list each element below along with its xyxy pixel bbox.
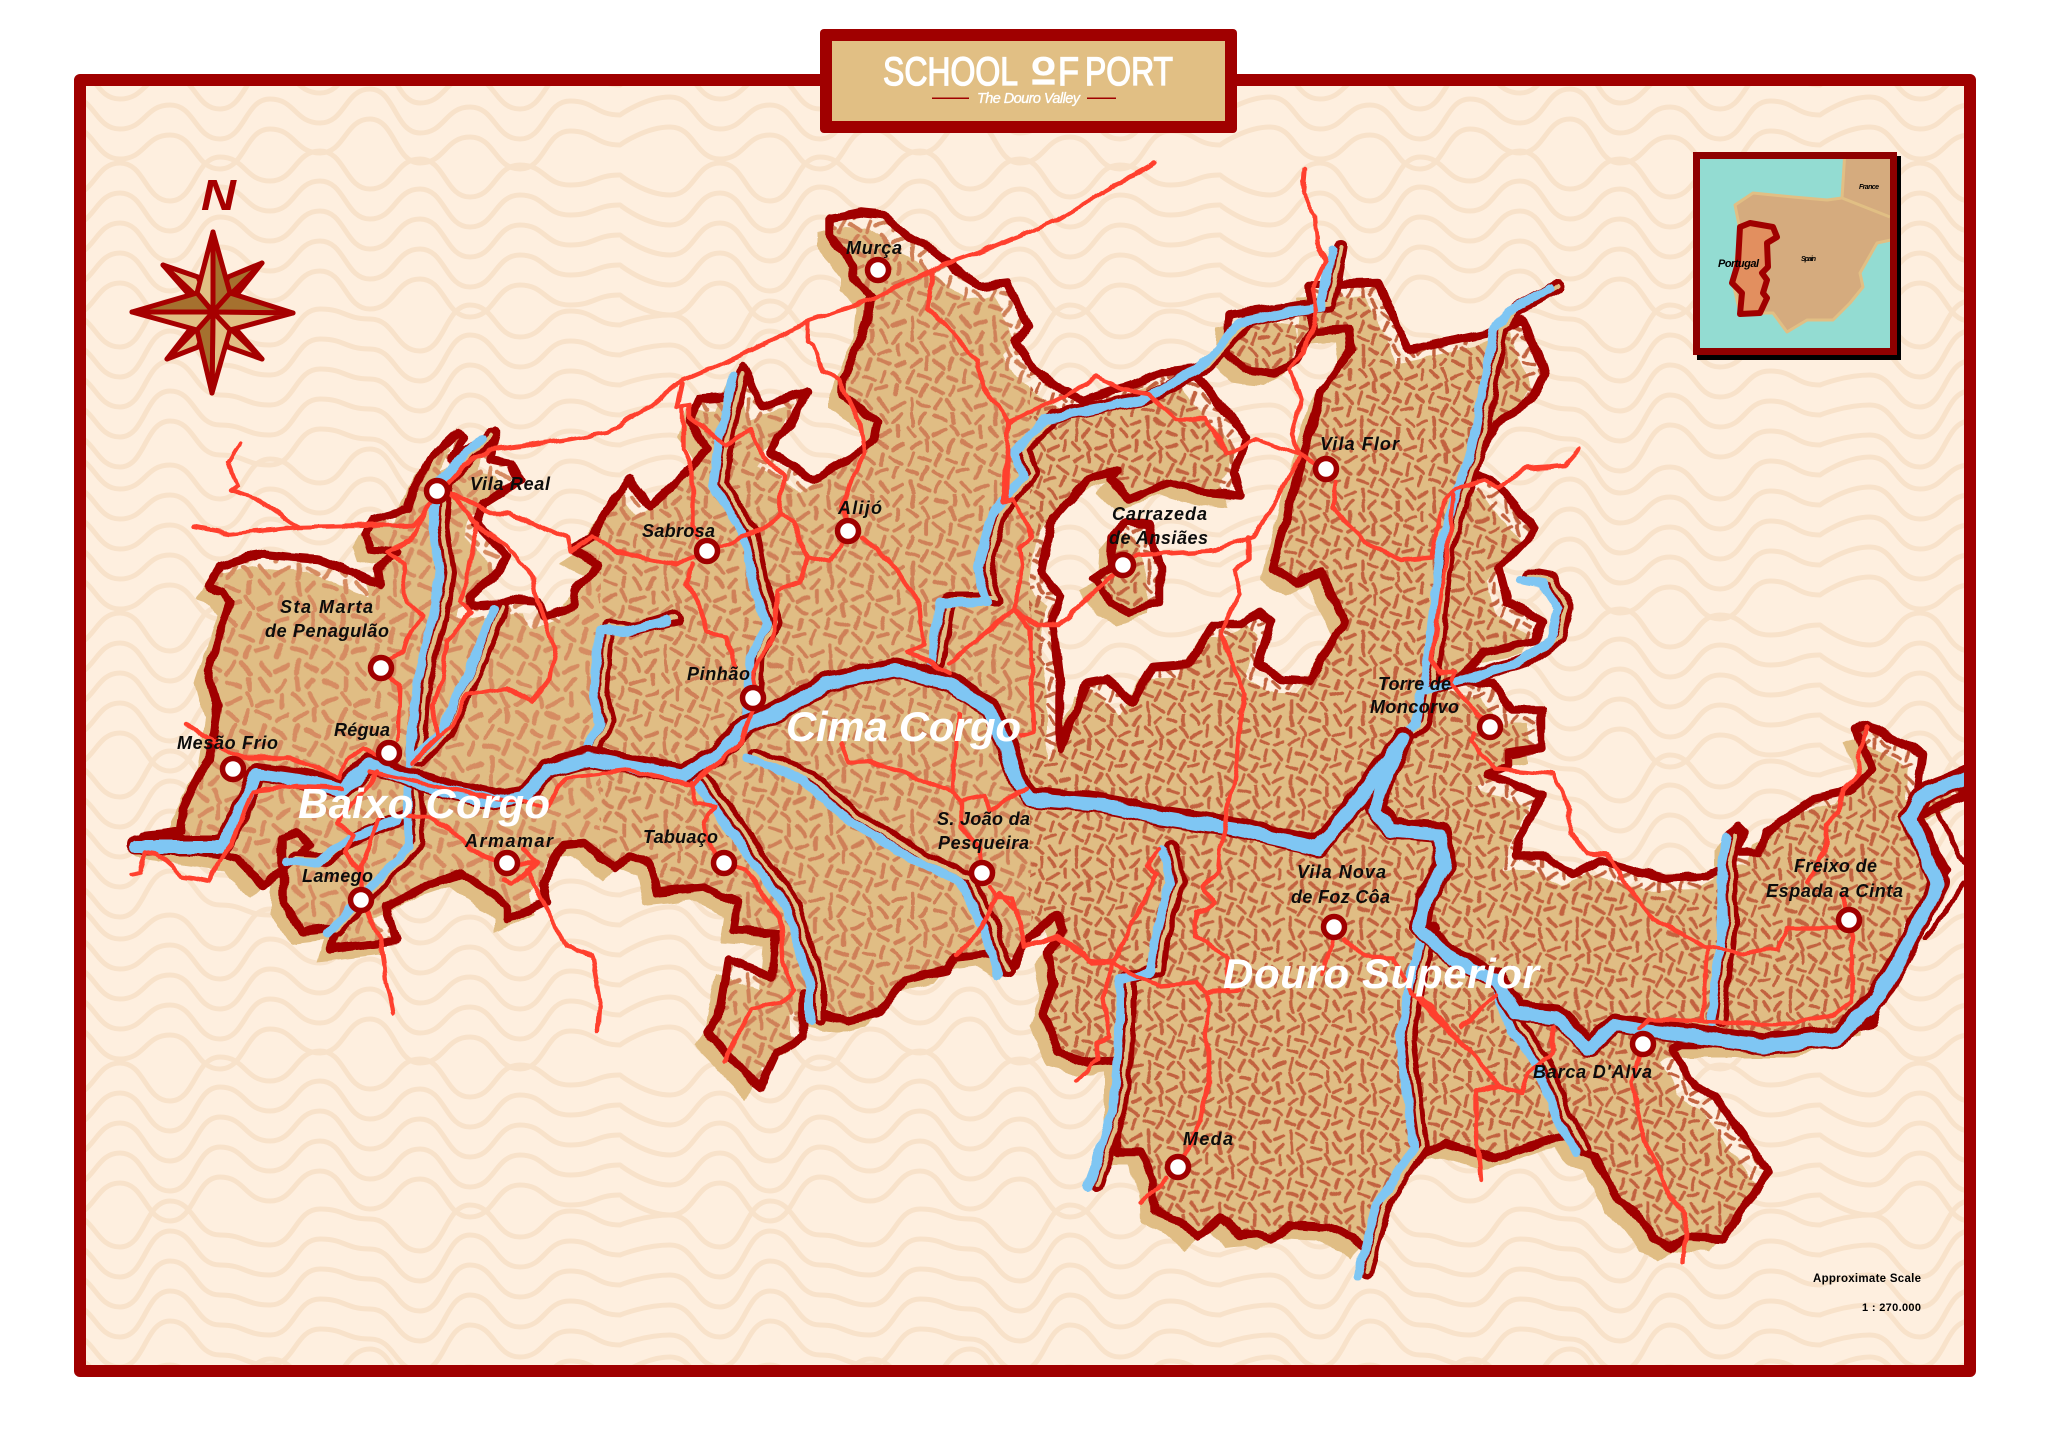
title plaque bbox=[820, 29, 1237, 133]
town labels: Espada a Cinta bbox=[1766, 881, 1903, 901]
town labels: Murça bbox=[846, 238, 902, 258]
Douro river bbox=[136, 668, 1975, 1050]
tributary banks bbox=[296, 247, 1736, 1273]
town labels: de Penagulão bbox=[265, 621, 389, 641]
north letter: N bbox=[201, 171, 237, 220]
town labels: Barca D'Alva bbox=[1533, 1062, 1652, 1082]
compass rose bbox=[132, 171, 293, 393]
Spain and France bbox=[1733, 150, 1900, 332]
town labels: Pinhão bbox=[687, 664, 750, 684]
Portugal bbox=[1732, 223, 1777, 314]
region labels: Cima Corgo bbox=[786, 703, 1021, 750]
town labels: Vila Flor bbox=[1320, 434, 1400, 454]
region labels: Baixo Corgo bbox=[298, 780, 550, 827]
town labels: Moncorvo bbox=[1370, 697, 1459, 717]
town labels: Meda bbox=[1183, 1129, 1233, 1149]
region labels bbox=[298, 703, 1542, 997]
inset locator map bbox=[1696, 150, 1901, 360]
land shadow bbox=[130, 226, 1951, 1260]
town labels: Lamego bbox=[302, 866, 373, 886]
title text: F bbox=[1058, 50, 1079, 94]
town labels: Pesqueira bbox=[938, 833, 1029, 853]
subtitle: The Douro Valley bbox=[977, 91, 1081, 107]
town labels: Mesão Frio bbox=[177, 733, 278, 753]
town labels: Sta Marta bbox=[280, 597, 373, 617]
town labels: Torre de bbox=[1378, 674, 1451, 694]
title text: PORT bbox=[1085, 50, 1173, 94]
region labels: Douro Superior bbox=[1223, 950, 1542, 997]
land outline bbox=[143, 213, 1964, 1247]
title text: O bbox=[1032, 53, 1055, 81]
scale note bbox=[1813, 1273, 1921, 1314]
town labels: Alijó bbox=[837, 498, 882, 518]
town labels: Freixo de bbox=[1794, 856, 1877, 876]
title text bbox=[883, 50, 1173, 94]
town labels: Vila Nova bbox=[1297, 862, 1386, 882]
roads bbox=[130, 163, 1868, 1262]
town labels: Sabrosa bbox=[642, 521, 715, 541]
town labels: Carrazeda bbox=[1112, 504, 1207, 524]
town labels: Armamar bbox=[464, 831, 554, 851]
tributary rivers bbox=[287, 250, 1727, 1276]
vineyard hatching by sub-region bbox=[184, 218, 1958, 1242]
town labels: de Ansiães bbox=[1109, 528, 1208, 548]
title text: SCHOOL bbox=[883, 50, 1018, 94]
scale note: Approximate Scale bbox=[1813, 1273, 1921, 1285]
inset locator map: Portugal bbox=[1718, 258, 1760, 270]
town labels: Régua bbox=[334, 720, 390, 740]
town labels bbox=[177, 238, 1903, 1149]
scale note: 1 : 270.000 bbox=[1862, 1302, 1921, 1314]
town labels: Vila Real bbox=[470, 474, 551, 494]
inset locator map: Spain bbox=[1801, 256, 1816, 263]
inset locator map: France bbox=[1859, 184, 1879, 191]
town markers bbox=[222, 260, 1860, 1178]
map: land, rivers and roads bbox=[100, 150, 1975, 1350]
town labels: Tabuaço bbox=[643, 827, 718, 847]
town labels: S. João da bbox=[937, 809, 1030, 829]
town labels: de Foz Côa bbox=[1291, 887, 1390, 907]
